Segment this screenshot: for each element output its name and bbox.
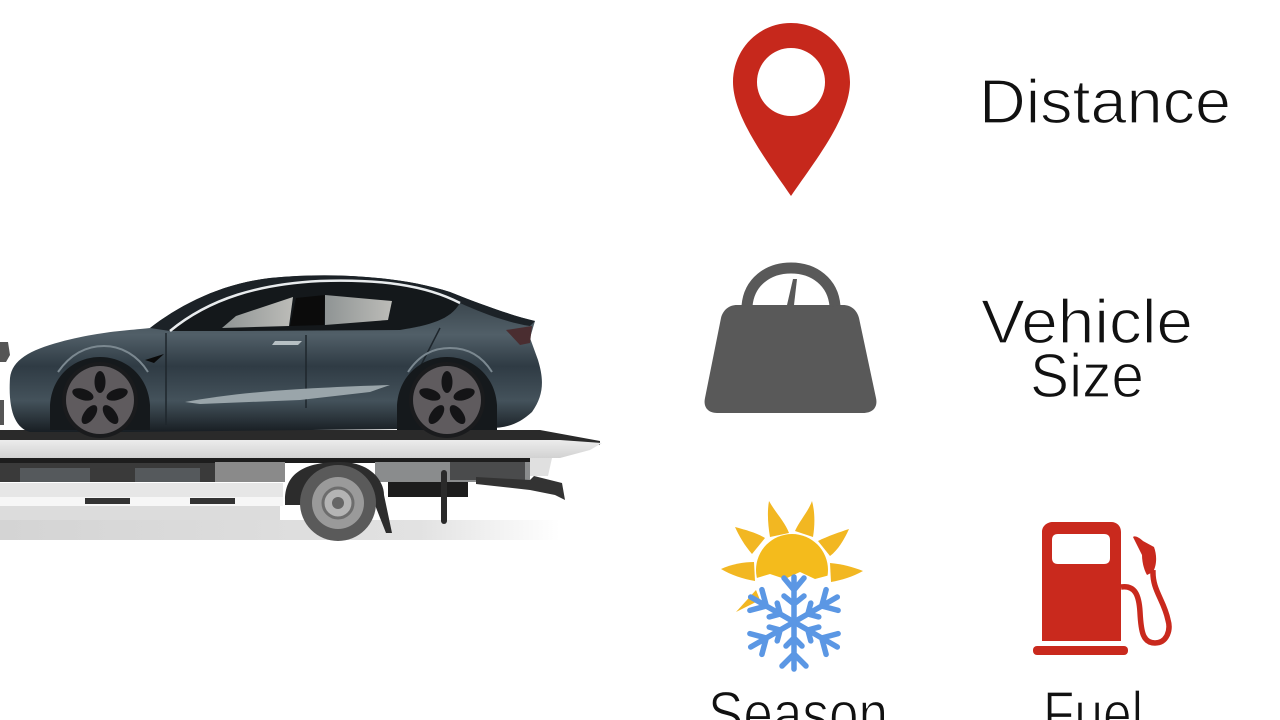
- car roof: [150, 275, 535, 331]
- tow hook at left edge: [0, 342, 10, 425]
- sun disc: [756, 534, 828, 579]
- snowflake: [745, 577, 843, 669]
- car window surround: [170, 281, 460, 331]
- car body: [10, 275, 542, 432]
- icon: location pin: [733, 23, 850, 196]
- label: vehicle size: Size: [1030, 342, 1144, 411]
- icon: fuel pump: [1033, 522, 1169, 655]
- car rear wheel: [409, 362, 485, 438]
- car body lines: [166, 328, 440, 425]
- sun rays: [721, 501, 863, 612]
- label: distance: Distance: [979, 68, 1231, 137]
- illustration: tesla on flatbed tow truck: [0, 275, 602, 541]
- car: [10, 275, 542, 438]
- icon: sun and snowflake: [721, 501, 863, 669]
- label: vehicle size: [981, 288, 1193, 411]
- car windows: [222, 297, 293, 328]
- truck rear wheel: [285, 462, 392, 541]
- label: vehicle size: Vehicle: [981, 288, 1193, 357]
- flatbed truck: [0, 430, 602, 524]
- icon: weight bag: [705, 268, 876, 413]
- truck shadow: [0, 520, 560, 540]
- car front wheel: [62, 362, 138, 438]
- car wheel arches: [50, 357, 497, 430]
